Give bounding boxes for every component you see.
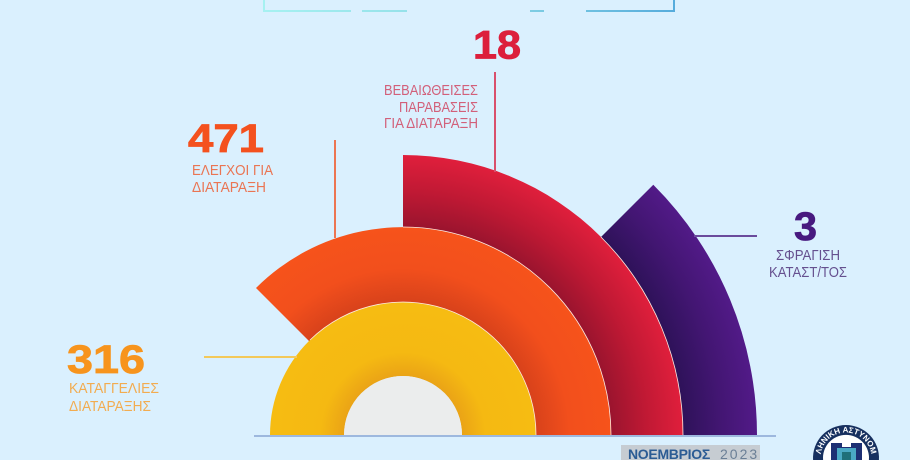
logo shield	[831, 443, 862, 460]
leader line	[694, 235, 757, 237]
logo: police emblem	[813, 425, 879, 460]
label	[192, 162, 273, 196]
label: ΕΛΕΓΧΟΙ ΓΙΑ	[192, 162, 273, 179]
segment separators	[310, 227, 683, 435]
label: ΔΙΑΤΑΡΑΞΗΣ	[69, 398, 151, 415]
number: 316	[67, 338, 145, 382]
label: ΠΑΡΑΒΑΣΕΙΣ	[399, 99, 478, 116]
number: 18	[473, 24, 521, 68]
label: ΚΑΤΑΣΤ/ΤΟΣ	[769, 264, 847, 281]
number: 471	[188, 117, 264, 161]
logo ring text: ΛΗΝΙΚΗ ΑΣΤΥΝΟΜ	[816, 426, 877, 454]
baseline	[254, 435, 776, 437]
leader line	[204, 356, 297, 358]
label	[384, 82, 478, 132]
stat: 316 reports	[67, 338, 297, 415]
stat: 3 closures	[694, 205, 847, 281]
leader line	[494, 72, 496, 172]
label: ΣΦΡΑΓΙΣΗ	[776, 247, 840, 264]
label: ΒΕΒΑΙΩΘΕΙΣΕΣ	[384, 82, 478, 99]
label	[769, 247, 847, 281]
segment: yellow	[270, 302, 536, 435]
label: ΔΙΑΤΑΡΑΞΗ	[192, 179, 266, 196]
segment: orange	[256, 227, 611, 435]
label	[69, 380, 159, 415]
segment: red	[403, 155, 683, 435]
logo inner disc	[823, 435, 869, 460]
segment: centre	[344, 376, 462, 435]
date badge	[621, 445, 760, 460]
stat: 18 violations	[384, 24, 521, 172]
stat: 471 checks	[188, 117, 336, 238]
logo ring	[813, 425, 879, 460]
number: 3	[794, 205, 817, 249]
label: ΚΑΤΑΓΓΕΛΙΕΣ	[69, 380, 159, 397]
segment: purple	[601, 185, 757, 435]
chart: concentric semi-circular segments	[254, 155, 776, 437]
leader line	[334, 140, 336, 238]
top title frame	[264, 0, 674, 11]
label: ΓΙΑ ΔΙΑΤΑΡΑΞΗ	[384, 115, 478, 132]
